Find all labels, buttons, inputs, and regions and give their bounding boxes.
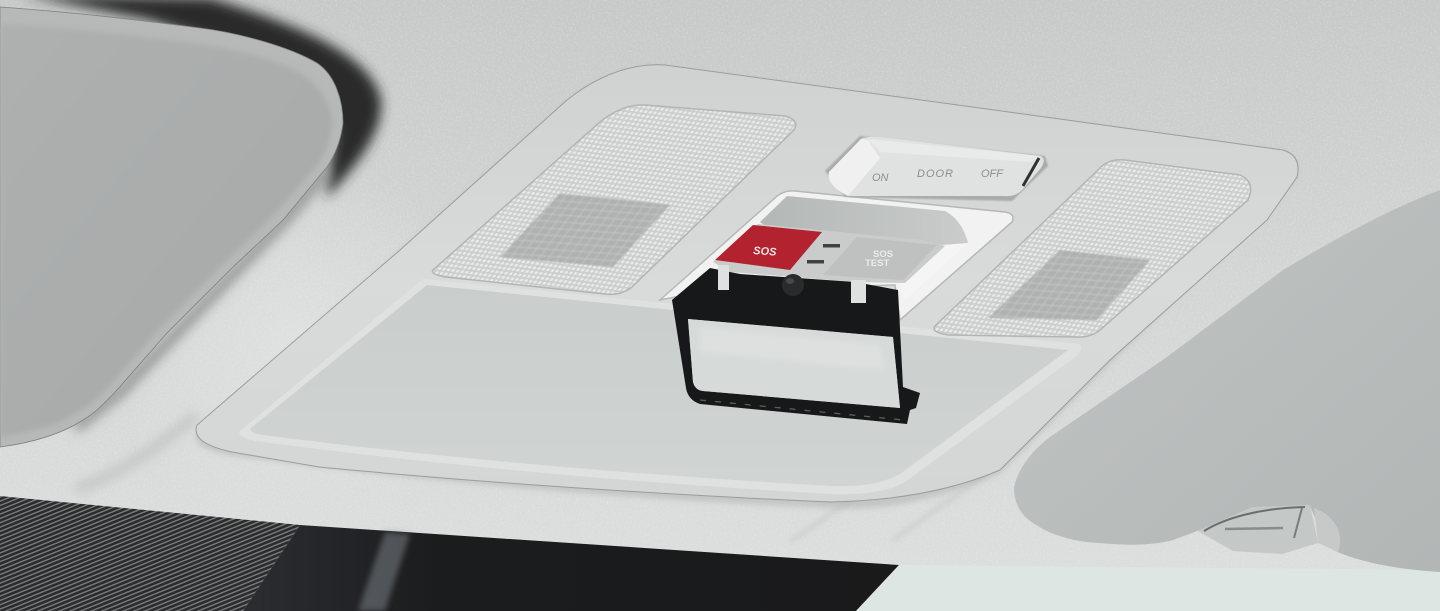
- soft shadow under left visor: [75, 170, 327, 428]
- lamp rocker switch: [825, 136, 1048, 201]
- console bezel: [196, 65, 1298, 502]
- switch labels: OFF: [981, 168, 1004, 180]
- grey SOS test button: SOS: [873, 249, 893, 260]
- switch labels: ON: [872, 172, 889, 184]
- grey SOS test button: [823, 237, 937, 280]
- windshield: dotted frit band: [0, 496, 300, 611]
- headliner creases lower right: [790, 473, 988, 542]
- SOS module face: [713, 224, 945, 283]
- console soft shadow: [196, 67, 1297, 509]
- headliner lit area: [110, 160, 490, 540]
- grey SOS test button: TEST: [865, 258, 889, 269]
- headliner crease lower left: [75, 415, 197, 490]
- pale area right of module: [900, 243, 968, 300]
- pale pins under module: [718, 265, 866, 303]
- lower right pale glass: [856, 565, 1440, 611]
- black folded-down module frame: [672, 268, 920, 424]
- switch labels: [872, 168, 1004, 184]
- indicator slots: [823, 244, 840, 248]
- left dome lamp lens: [432, 105, 796, 294]
- right sun visor: [1014, 190, 1440, 572]
- switch labels: DOOR: [917, 168, 954, 180]
- windshield: dark glass: [243, 525, 899, 611]
- dark pivot knob: [782, 274, 804, 296]
- red SOS button: [715, 225, 822, 270]
- SOS module opening: [660, 191, 1013, 320]
- visor clip: [1198, 505, 1340, 554]
- left sun visor: [0, 7, 343, 447]
- right dome lamp lens: [934, 160, 1251, 337]
- left visor fabric face: [0, 24, 332, 437]
- dark recess behind left visor: [20, 0, 381, 198]
- storage compartment cover: [239, 279, 1081, 494]
- SOS module grey hood: [760, 196, 968, 245]
- windshield: reflection streak: [358, 532, 410, 611]
- red SOS button: SOS: [753, 245, 777, 259]
